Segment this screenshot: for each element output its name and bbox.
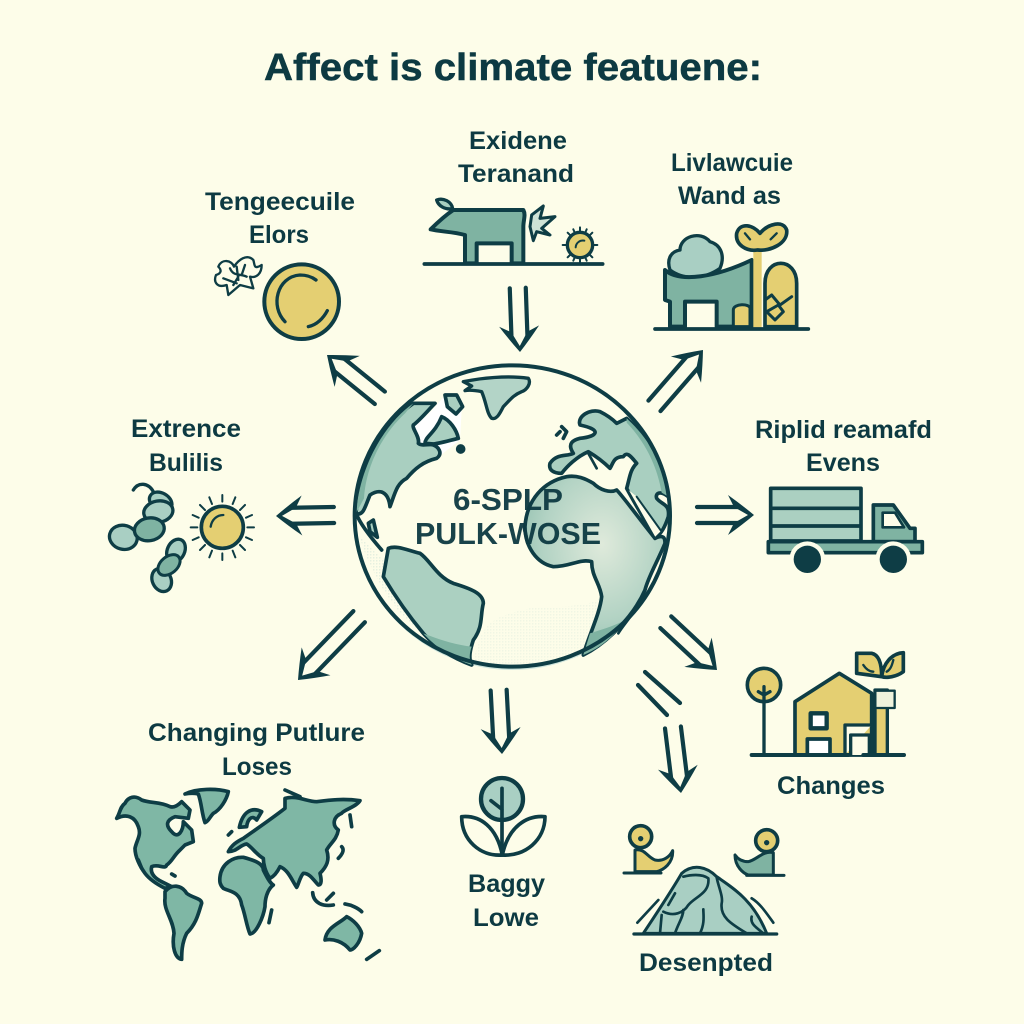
icon: farm building and plant — [655, 224, 808, 329]
arrow: upper right — [639, 337, 718, 419]
globe label — [415, 482, 601, 551]
heading: Extrence — [131, 415, 241, 443]
heading: Bulilis — [149, 449, 223, 477]
heading: Exidene — [469, 127, 567, 155]
heading: Lowe — [473, 904, 539, 932]
panel: Changing Putlure Loses — [117, 719, 379, 959]
heading: Teranand — [458, 160, 574, 188]
icon: sprout in circle — [462, 778, 545, 855]
arrow: upper left — [314, 339, 392, 413]
heading — [205, 188, 355, 249]
heading — [755, 416, 932, 477]
icon: animal and sun — [424, 199, 603, 264]
heading — [131, 415, 241, 477]
arrow: bottom — [479, 689, 522, 755]
heading: Livlawcuie — [671, 149, 793, 177]
panel: Extrence Bulilis — [107, 415, 254, 595]
heading: Tengeecuile — [205, 188, 355, 216]
heading — [148, 719, 365, 781]
greenland — [463, 377, 529, 419]
heading: Elors — [249, 221, 309, 249]
eurasia — [550, 411, 669, 538]
heading — [468, 870, 545, 932]
heading: Loses — [222, 753, 292, 781]
panel: Exidene Teranand — [424, 127, 603, 264]
globe label: PULK-WOSE — [415, 516, 601, 551]
arrow: lower right long — [638, 672, 701, 795]
panel: Desenpted — [624, 826, 784, 977]
panel: Changes — [747, 653, 904, 800]
globe — [355, 365, 670, 670]
icon: two figures and mound — [624, 826, 784, 934]
icon: sun and leaves — [107, 484, 254, 595]
heading: Riplid reamafd — [755, 416, 932, 444]
arrow: lower right — [652, 608, 731, 685]
arrow: lower left — [284, 603, 374, 694]
icon: house, tree and sprout — [747, 653, 904, 755]
arrow: top — [498, 287, 540, 353]
panel: Baggy Lowe — [462, 778, 545, 932]
south america — [383, 547, 483, 665]
africa — [525, 476, 665, 655]
icon: truck — [768, 488, 922, 577]
arrow: left — [276, 495, 334, 536]
heading: Desenpted — [639, 949, 773, 977]
heading: Baggy — [468, 870, 545, 898]
heading: Evens — [806, 449, 880, 477]
heading: Changes — [777, 772, 885, 800]
title: Affect is climate featuene: — [264, 47, 762, 89]
panel: Riplid reamafd Evens — [755, 416, 932, 577]
heading: Changing Putlure — [148, 719, 365, 747]
icon: yellow disc and flower — [215, 257, 339, 339]
heading: Wand as — [678, 182, 781, 210]
hudson inlet — [415, 393, 462, 458]
icon: world map — [117, 789, 379, 959]
globe label: 6-SPLP — [453, 482, 563, 517]
panel: Livlawcuie Wand as — [655, 149, 808, 329]
heading — [671, 149, 793, 210]
north america — [356, 395, 464, 550]
arrow: right — [697, 495, 754, 535]
heading — [458, 127, 574, 188]
panel: Tengeecuile Elors — [205, 188, 355, 339]
